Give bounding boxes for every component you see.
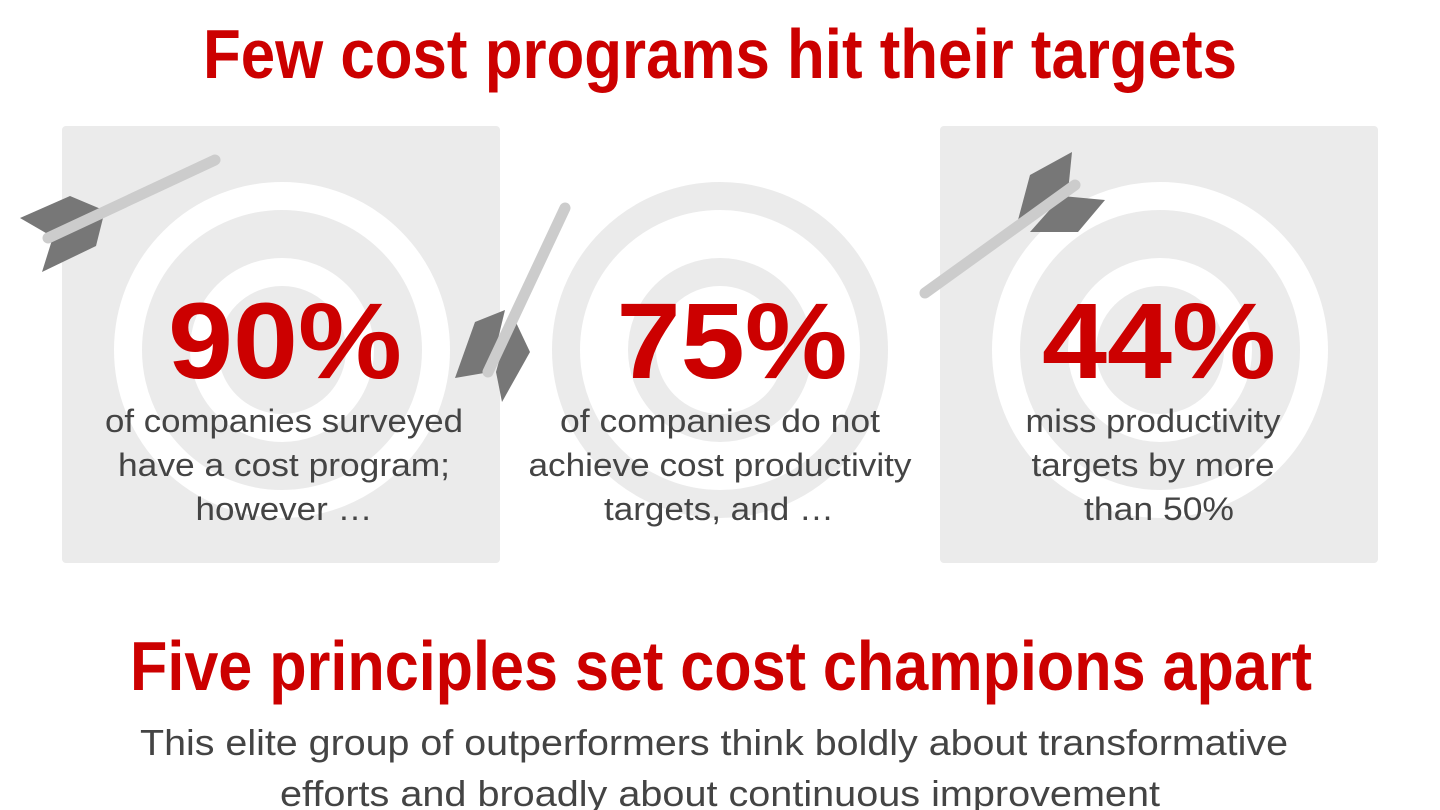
text block: than 50% [1084, 491, 1234, 527]
text block: of companies surveyed [105, 403, 463, 439]
stat number: 44% [1042, 280, 1276, 401]
title: Few cost programs hit their targets [203, 15, 1237, 93]
icon: arrow middle [455, 208, 565, 402]
subtitle [140, 722, 1288, 810]
text block: targets, and … [604, 491, 834, 527]
icon: target left [128, 196, 436, 504]
text block: have a cost program; [118, 447, 450, 483]
subtitle: This elite group of outperformers think boldly about transformative [140, 722, 1288, 763]
icon: target right [1006, 196, 1314, 504]
text block: however … [196, 491, 372, 527]
icon: target middle [566, 196, 874, 504]
text block [1026, 403, 1280, 527]
stat number: 90% [168, 280, 402, 401]
text block: achieve cost productivity [528, 447, 912, 483]
panel: 90% [20, 126, 500, 563]
text block: targets by more [1032, 447, 1274, 483]
panel: 44% [925, 126, 1378, 563]
text block: miss productivity [1026, 403, 1280, 439]
text block [105, 403, 463, 527]
icon: arrow left [20, 160, 215, 272]
icon: arrow right [925, 152, 1105, 293]
panel: 75% [455, 196, 912, 527]
text block: of companies do not [560, 403, 880, 439]
text block [528, 403, 912, 527]
stat number: 75% [616, 280, 848, 401]
